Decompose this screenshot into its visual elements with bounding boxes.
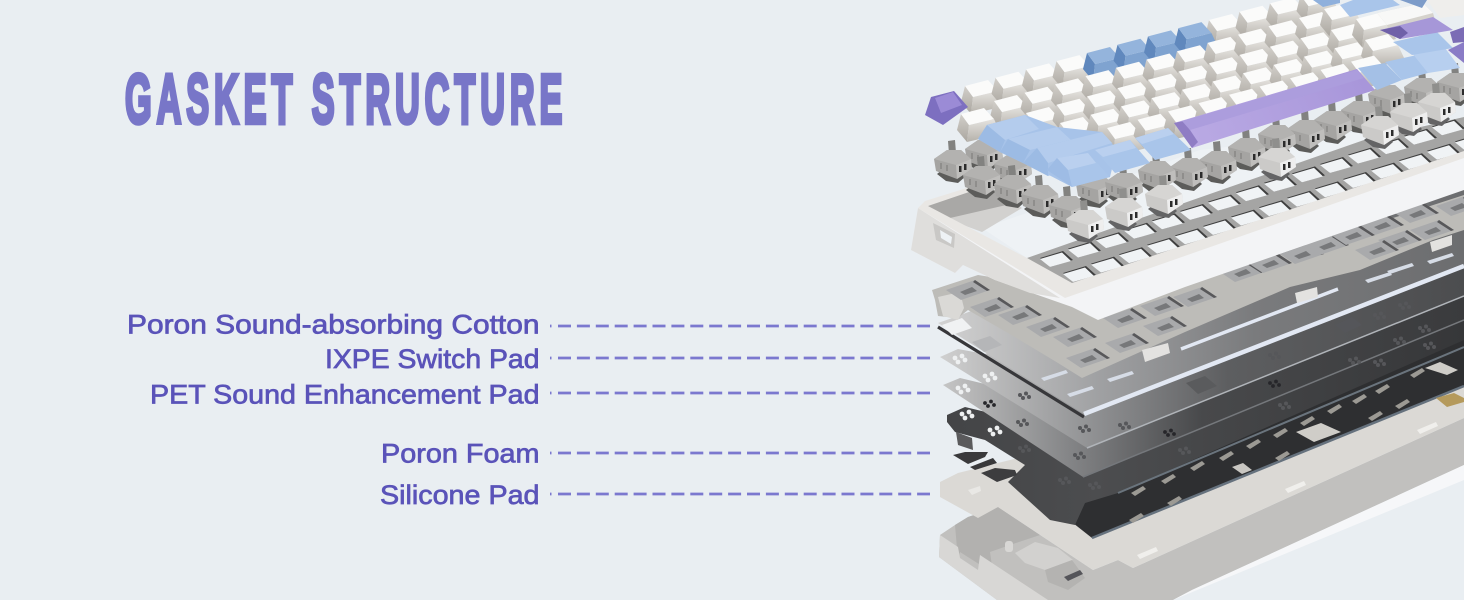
tray tabs bbox=[968, 422, 1438, 559]
purple space bar bbox=[1174, 69, 1375, 148]
leader line: IXPE Switch Pad bbox=[550, 357, 930, 359]
Poron sound-absorbing cotton plate bbox=[932, 150, 1464, 417]
leader line: Poron Foam bbox=[550, 452, 930, 454]
layer labels with dashed leader lines bbox=[127, 310, 930, 510]
label: IXPE Switch Pad: IXPE Switch Pad bbox=[325, 344, 540, 374]
leader line: Poron Sound-absorbing Cotton bbox=[550, 325, 930, 327]
PET sound enhancement pad bbox=[943, 200, 1464, 477]
mechanical switches bbox=[934, 63, 1464, 243]
Poron foam layer bbox=[947, 240, 1464, 525]
label: Silicone Pad: Silicone Pad bbox=[380, 480, 540, 510]
bottom case bbox=[939, 418, 1464, 600]
IXPE switch pad bbox=[940, 170, 1464, 448]
leader line: Silicone Pad bbox=[550, 493, 930, 495]
leader line: PET Sound Enhancement Pad bbox=[550, 392, 930, 394]
switch plate bbox=[982, 117, 1464, 286]
silicone pad / tray bbox=[940, 340, 1464, 570]
lattice cotton pad bbox=[932, 195, 1464, 378]
purple accent keycaps bbox=[1380, 17, 1464, 63]
top case frame bbox=[911, 151, 1464, 320]
title: GASKET STRUCTURE bbox=[125, 59, 567, 138]
top right white keycaps bbox=[1377, 0, 1464, 35]
blue modifier keycaps bbox=[978, 0, 1460, 187]
white cotton tabs bbox=[1142, 235, 1452, 362]
purple escape key bbox=[925, 91, 968, 125]
white alpha keycaps bbox=[957, 0, 1405, 156]
keycaps bbox=[925, 0, 1464, 187]
PCB bbox=[1060, 330, 1464, 538]
label: PET Sound Enhancement Pad: PET Sound Enhancement Pad bbox=[150, 380, 540, 410]
exploded keyboard illustration bbox=[911, 0, 1464, 600]
label: Poron Sound-absorbing Cotton: Poron Sound-absorbing Cotton bbox=[127, 310, 540, 340]
label: Poron Foam: Poron Foam bbox=[381, 438, 540, 468]
